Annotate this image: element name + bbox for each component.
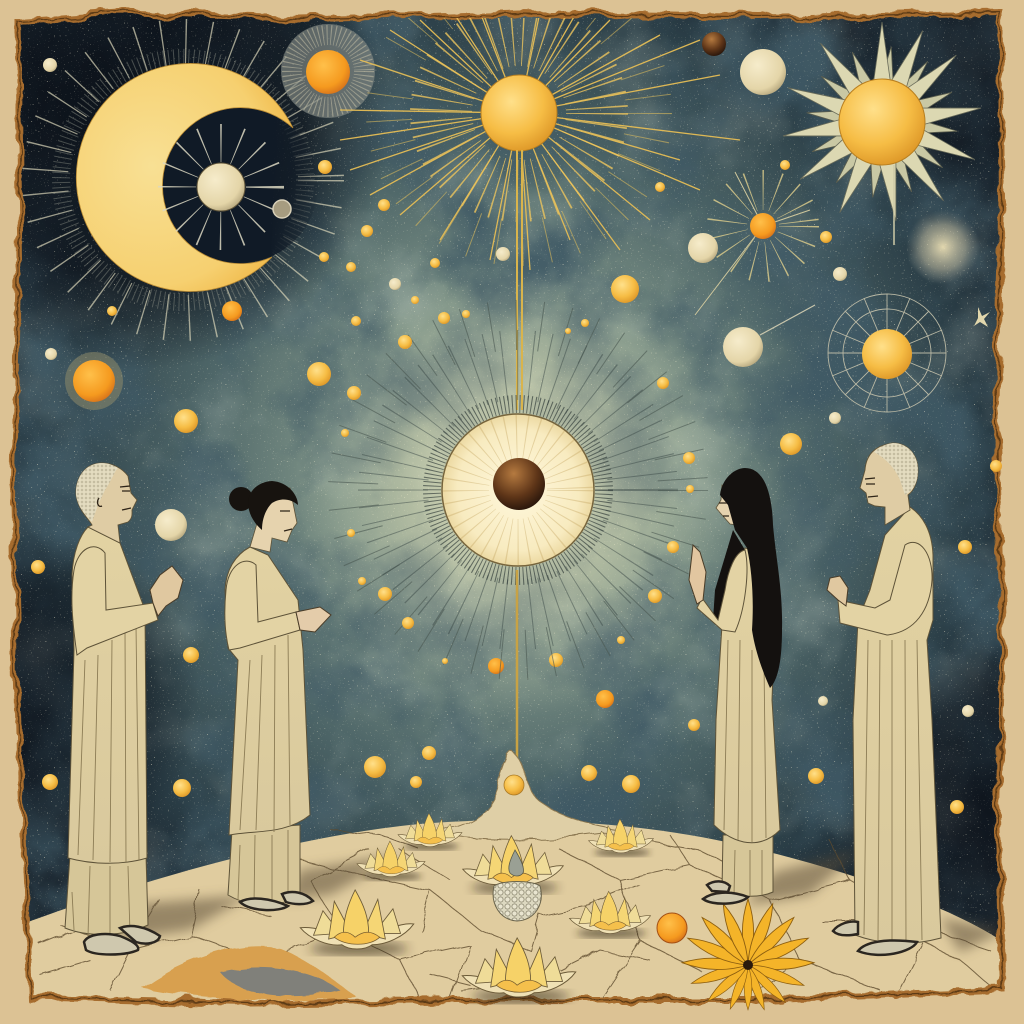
textured cap bbox=[76, 463, 118, 522]
near left lotus bbox=[357, 841, 425, 880]
central mound bbox=[420, 752, 625, 839]
sleeve bbox=[838, 542, 932, 635]
ground with cracks bbox=[20, 820, 1008, 1010]
eye fine rays bbox=[466, 438, 570, 542]
vertical beam bbox=[517, 150, 522, 410]
pleats bbox=[724, 640, 766, 897]
pigment stain bbox=[142, 946, 358, 1000]
pleats bbox=[864, 640, 922, 942]
orange ball bbox=[657, 913, 687, 943]
yellow daisy bbox=[682, 899, 814, 1011]
lower skirt bbox=[65, 855, 148, 934]
lower skirt bbox=[228, 825, 300, 905]
inner sphere bbox=[197, 163, 245, 211]
small satellite bbox=[273, 200, 291, 218]
moon rays bbox=[45, 42, 321, 318]
head bbox=[860, 443, 918, 525]
hands bbox=[689, 545, 706, 604]
crescent bbox=[76, 63, 293, 291]
face lines bbox=[719, 503, 729, 516]
face lines bbox=[280, 511, 292, 531]
large central halo bbox=[293, 265, 743, 715]
far left lotus bbox=[398, 813, 462, 850]
tunic bbox=[714, 548, 780, 843]
pupil sphere bbox=[493, 458, 545, 510]
face bbox=[716, 485, 738, 525]
shoes bbox=[703, 881, 748, 904]
hand bbox=[296, 607, 331, 632]
shoes bbox=[240, 892, 313, 910]
figure shadows bbox=[120, 850, 1005, 952]
sun rays bbox=[340, 12, 740, 270]
robe bbox=[853, 507, 941, 943]
lotus flowers bbox=[300, 813, 653, 1003]
hand bbox=[827, 576, 848, 606]
lower skirt bbox=[722, 835, 773, 896]
long black hair bbox=[720, 468, 782, 688]
cracks bbox=[40, 830, 990, 1000]
orbit needles bbox=[353, 325, 683, 655]
figure: bald monk left bbox=[65, 463, 183, 954]
glowing white star bbox=[906, 210, 980, 284]
far right lotus bbox=[589, 819, 653, 856]
face bbox=[250, 488, 297, 552]
bottom lotus bbox=[462, 938, 576, 1003]
right lotus bbox=[569, 891, 651, 938]
planet bbox=[862, 329, 912, 379]
tunic bbox=[225, 547, 310, 835]
orange planet with halo bbox=[281, 24, 375, 118]
sleeve bbox=[225, 561, 300, 650]
moon shadow disc bbox=[162, 107, 318, 263]
planet in armillary grid bbox=[828, 294, 946, 412]
lower beam bbox=[516, 570, 518, 760]
crescent moon group bbox=[45, 42, 321, 318]
central eye mandala bbox=[341, 310, 695, 760]
head bbox=[76, 463, 137, 543]
spikes bbox=[782, 22, 982, 222]
cream planets bbox=[155, 32, 990, 541]
hair behind body bbox=[713, 530, 745, 620]
pleats bbox=[72, 625, 139, 938]
shoes bbox=[84, 926, 160, 954]
golden planets bbox=[31, 58, 1002, 814]
spiky sun right bbox=[782, 22, 982, 245]
sleeve bbox=[697, 550, 747, 632]
figure: long-haired woman bbox=[689, 468, 782, 904]
hair bbox=[229, 481, 298, 530]
face lines bbox=[865, 478, 878, 497]
sun disc bbox=[481, 75, 557, 151]
eye disc bbox=[442, 414, 594, 566]
small star sun bbox=[695, 172, 810, 315]
face lines bbox=[98, 486, 131, 510]
textured cap bbox=[874, 443, 918, 495]
figure: woman with bun bbox=[225, 481, 331, 910]
orbiting beads bbox=[341, 310, 695, 664]
pleats bbox=[238, 635, 290, 906]
radiating needles bbox=[393, 365, 643, 615]
tunic bbox=[68, 527, 147, 863]
sleeve bbox=[72, 547, 158, 655]
big left lotus bbox=[300, 890, 414, 955]
disc bbox=[839, 79, 925, 165]
shoes bbox=[833, 921, 917, 955]
central top sun bbox=[340, 0, 740, 410]
central pine bud bbox=[493, 850, 541, 921]
figure: bald monk right bbox=[827, 443, 941, 955]
inner sphere rays bbox=[177, 143, 265, 231]
grid rings bbox=[828, 294, 946, 412]
hand bbox=[150, 566, 183, 616]
central lotus bbox=[463, 836, 563, 893]
